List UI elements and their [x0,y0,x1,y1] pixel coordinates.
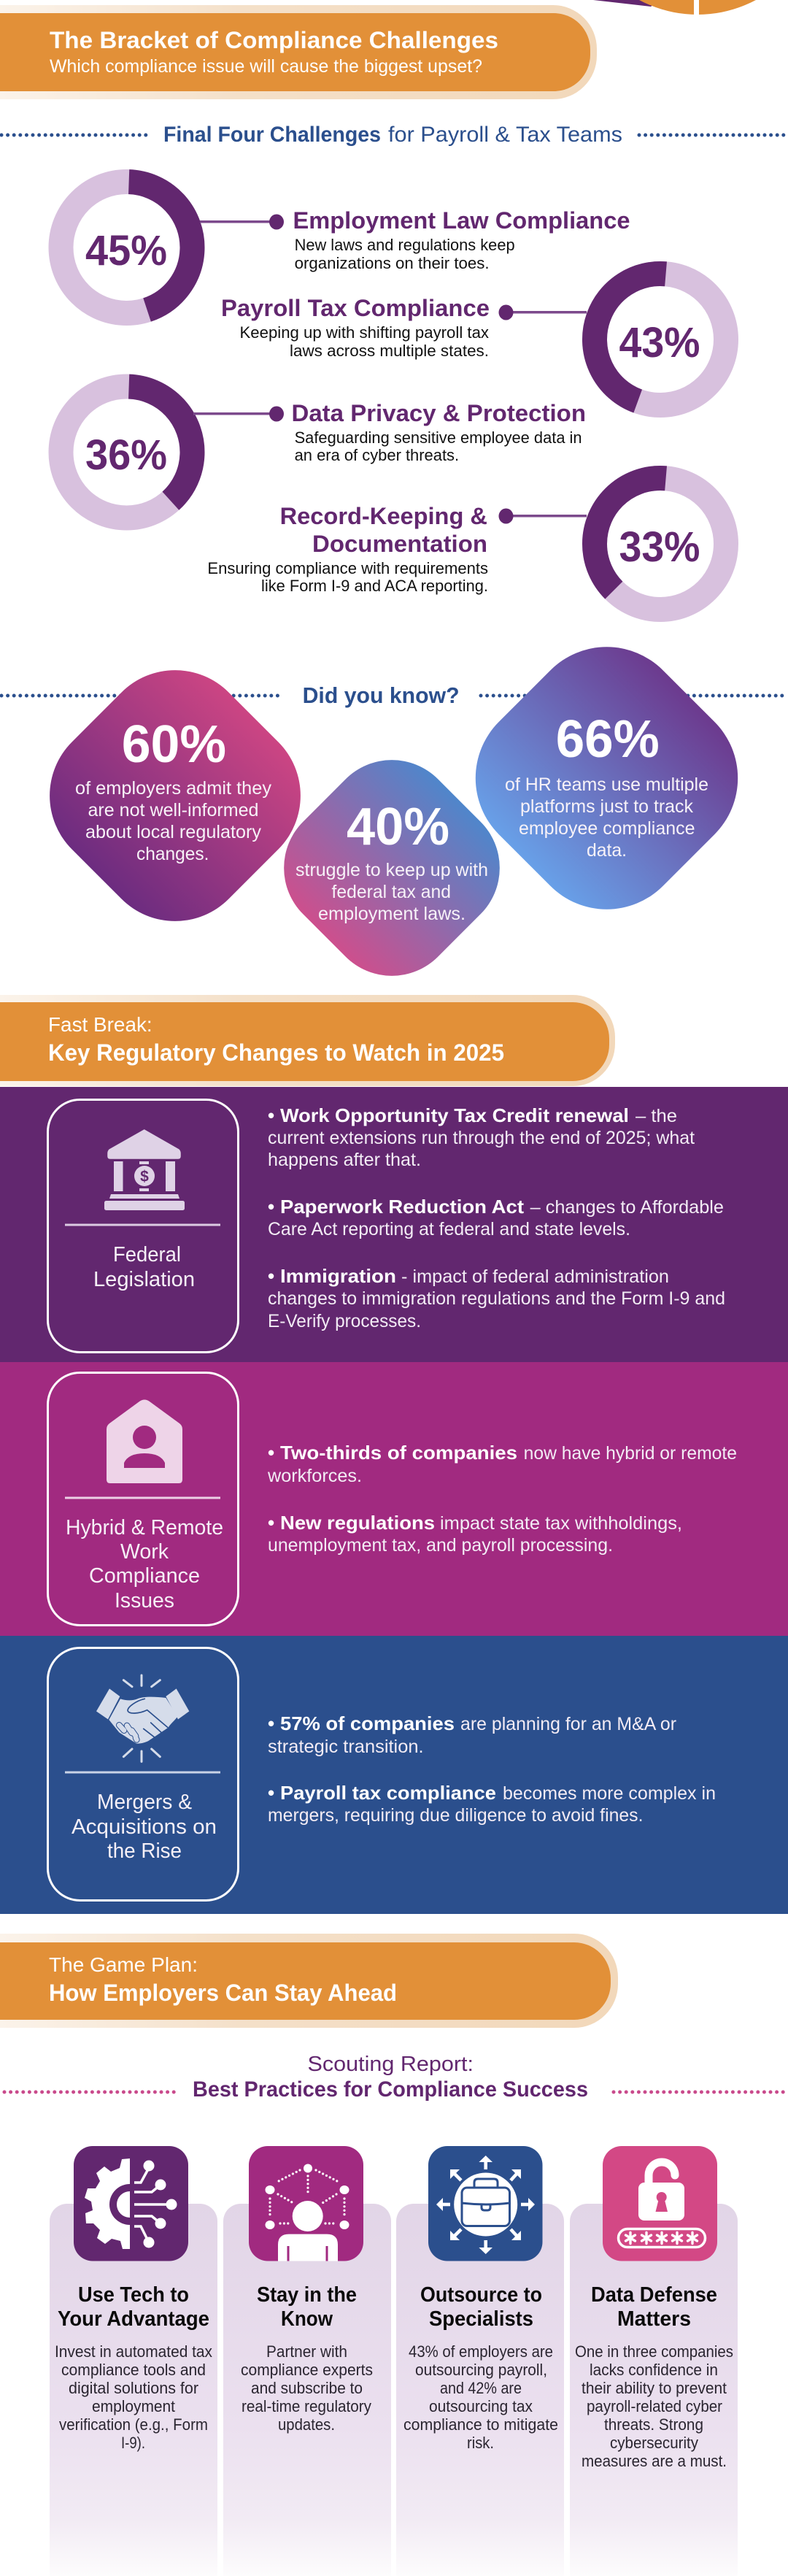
card: use tech to your advantage [50,2146,217,2576]
stat: 66% of HR teams: of HR teams use multiple [505,774,708,795]
challenge text: Payroll Tax Compliance [221,295,490,321]
card body [575,2342,733,2470]
bullet: work opportunity tax credit: Work Opportunity Tax Credit renewal [280,1104,629,1126]
label text: Acquisitions on [72,1815,217,1839]
card body: outsourcing payroll, [415,2361,547,2379]
panel: federal legislation [0,1087,788,1363]
challenge text: New laws and regulations keep [295,236,515,254]
label text: Work [120,1540,169,1564]
icon: bank with dollar: $ [140,1168,149,1185]
donut chart: 33%: 33% [619,523,700,571]
card: stay in the know [223,2146,391,2576]
bullet: 57% of companies: 57% of companies [280,1712,455,1734]
card title: Your Advantage [58,2307,209,2331]
icon: handshake [96,1675,189,1761]
banner: bracket of compliance challenges [0,5,597,99]
bullet: paperwork reduction act: • [268,1196,274,1218]
stat: 66% of HR teams: data. [587,840,627,861]
bullet: 57% of companies [268,1712,676,1757]
banner: bracket of compliance challenges: The Bracket of Compliance Challenges [50,27,498,53]
bullet: work opportunity tax credit: happens after that. [268,1150,421,1170]
stat: 66% of HR teams: 66% [556,710,660,769]
bullet: immigration: E-Verify processes. [268,1311,421,1331]
challenge text: Record-Keeping & [280,503,487,529]
bullet: work opportunity tax credit: • [268,1104,274,1126]
banner: the game plan: How Employers Can Stay Ahead [49,1980,397,2006]
bullet: two-thirds of companies: now have hybrid or remote [524,1443,737,1464]
stat: 40% struggle: employment laws. [318,904,466,924]
bullet: immigration: - impact of federal administration [401,1266,669,1287]
card body: One in three companies [575,2342,733,2361]
divider [65,1771,220,1774]
card body: 43% of employers are [409,2342,553,2361]
banner: fast break [0,995,615,1086]
challenge text: Employment Law Compliance [293,207,630,234]
heading: final four challenges: for Payroll & Tax Teams [388,123,622,147]
challenge text: an era of cyber threats. [295,446,459,464]
card title: Stay in the [257,2283,357,2307]
card title: Outsource to [420,2283,542,2307]
stat: 66% of HR teams: employee compliance [519,818,695,839]
bullet: 57% of companies: are planning for an M&A or [460,1714,676,1734]
bullet: immigration: Immigration [280,1265,396,1287]
challenge text: Keeping up with shifting payroll tax [239,323,489,342]
bullet: immigration: • [268,1265,274,1287]
label card: hybrid and remote [48,1372,238,1625]
card body: verification (e.g., Form [59,2415,208,2434]
bullet: two-thirds of companies: Two-thirds of companies [280,1442,517,1464]
label text: Compliance [89,1564,200,1588]
card body: digital solutions for [69,2379,198,2397]
bullet: paperwork reduction act: Paperwork Reduction Act [280,1196,524,1218]
card title [420,2283,542,2331]
icon: basketball fragment [573,0,788,16]
bullet: 57% of companies: strategic transition. [268,1737,424,1757]
card title: Know [281,2307,333,2331]
heading: final four challenges [1,123,788,147]
card body: employment [92,2397,175,2415]
bullet: paperwork reduction act [268,1196,724,1239]
bullet: new regulations: New regulations [280,1512,435,1534]
card body: their ability to prevent [582,2379,727,2397]
challenge: payroll tax compliance [221,255,744,423]
card body: Partner with [266,2342,347,2361]
icon: briefcase with arrows [428,2146,543,2261]
label card: federal legislation [48,1099,238,1352]
donut chart: 43% [576,255,744,423]
connector [193,406,284,422]
bullet: payroll tax compliance: Payroll tax compliance [280,1782,496,1804]
stat: 40% struggle: 40% [347,798,449,856]
challenge: data privacy and protection [58,384,586,520]
challenge text [292,400,586,464]
card body: compliance to mitigate [403,2415,558,2434]
bullet: payroll tax compliance: mergers, requiring due diligence to avoid fines. [268,1805,644,1826]
heading: scouting report [4,2053,788,2102]
heading: final four challenges: Final Four Challenges [163,123,381,147]
challenge text: Documentation [312,531,487,557]
bullet: work opportunity tax credit: – the [636,1106,677,1126]
bullet: new regulations: • [268,1512,274,1534]
heading: scouting report: Best Practices for Compliance Success [193,2077,588,2102]
label text: Issues [115,1589,174,1612]
bullet: new regulations [268,1512,682,1556]
donut chart: 33% [568,451,753,637]
challenge text [207,503,488,595]
stat: 60% of employers: are not well-informed [88,800,258,820]
challenge text: like Form I-9 and ACA reporting. [261,577,488,595]
bullet: work opportunity tax credit: current extensions run through the end of 2025; what [268,1128,695,1148]
bullet: paperwork reduction act: Care Act reporting at federal and state levels. [268,1219,630,1239]
bullet: immigration [268,1265,725,1331]
icon: gear and circuit [74,2146,188,2261]
banner: the game plan [0,1934,618,2028]
card body [241,2342,373,2434]
label text [93,1243,195,1291]
donut chart: 43%: 43% [619,319,700,366]
heading: scouting report: Scouting Report: [308,2053,474,2076]
card: outsource to specialists [396,2146,564,2576]
banner: bracket of compliance challenges: Which compliance issue will cause the biggest upset? [50,56,482,77]
card body: threats. Strong [604,2415,703,2434]
challenge: employment law compliance [58,180,630,315]
label text: the Rise [107,1839,182,1863]
label text [66,1516,223,1612]
card body: measures are a must. [582,2452,727,2470]
bullet: two-thirds of companies [267,1442,737,1486]
card: data defense matters [570,2146,738,2576]
card body: payroll-related cyber [587,2397,722,2415]
icon: house with person [107,1400,182,1483]
label text: Federal [113,1243,181,1266]
icon: open lock with password [603,2146,717,2261]
stat: 40% struggle [257,733,527,1003]
stat: 60% of employers: 60% [122,715,226,774]
challenge text: Safeguarding sensitive employee data in [295,428,582,447]
card title: Data Defense [591,2283,717,2307]
card body: real-time regulatory [242,2397,371,2415]
bullet: payroll tax compliance: • [268,1782,274,1804]
card body: I-9). [121,2434,145,2452]
card body: compliance experts [241,2361,373,2379]
card body [403,2342,558,2452]
challenge text: organizations on their toes. [295,254,490,272]
banner: fast break: Key Regulatory Changes to Watch in 2025 [48,1039,504,1066]
card body: risk. [467,2434,494,2452]
card title [58,2283,209,2331]
challenge text [293,207,630,272]
stat: 60% of employers [18,639,332,953]
bullet: 57% of companies: • [268,1712,274,1734]
card title: Specialists [429,2307,533,2331]
bullet: work opportunity tax credit [268,1104,695,1170]
card body: cybersecurity [610,2434,698,2452]
card body: updates. [278,2415,335,2434]
bullet: immigration: changes to immigration regulations and the Form I-9 and [268,1288,725,1309]
challenge text: Ensuring compliance with requirements [207,559,488,577]
card body: outsourcing tax [429,2397,533,2415]
bullet: payroll tax compliance [268,1782,716,1826]
challenge text: laws across multiple states. [290,342,489,360]
stat: 66% of HR teams [443,614,770,942]
heading: did you know: Did you know? [303,683,460,708]
connector [499,305,587,320]
bullet: two-thirds of companies: • [268,1442,274,1464]
label text: Hybrid & Remote [66,1516,223,1539]
stat: 60% of employers: changes. [136,844,209,864]
divider [65,1223,220,1226]
label text [72,1791,217,1863]
stat: 40% struggle: federal tax and [331,882,451,902]
banner: the game plan: The Game Plan: [49,1953,198,1976]
banner: fast break: Fast Break: [48,1013,152,1036]
card title [591,2283,717,2331]
card body: and 42% are [440,2379,522,2397]
card title [257,2283,357,2331]
donut chart: 36% [58,384,195,520]
card body: lacks confidence in [590,2361,718,2379]
challenge: record-keeping and documentation [207,451,753,637]
stat: 66% of HR teams: platforms just to track [520,796,693,817]
panel: mergers and acquisitions [0,1636,788,1914]
challenge text: Data Privacy & Protection [292,400,586,426]
card body: Invest in automated tax [55,2342,212,2361]
icon: person with network [249,2146,363,2261]
card title: Use Tech to [78,2283,189,2307]
label card: mergers and acquisitions [48,1648,238,1901]
connector [499,508,587,524]
bullet: new regulations: unemployment tax, and payroll processing. [268,1535,613,1556]
bullet: paperwork reduction act: – changes to Affordable [530,1197,724,1218]
card body [55,2342,212,2452]
label text: Mergers & [97,1791,192,1814]
donut chart: 45%: 45% [85,227,167,274]
connector [200,215,284,229]
card title: Matters [617,2307,691,2331]
card body: compliance tools and [61,2361,206,2379]
bullet: two-thirds of companies: workforces. [267,1466,362,1486]
card body: and subscribe to [251,2379,363,2397]
stat: 60% of employers: of employers admit they [75,778,271,799]
bullet: payroll tax compliance: becomes more complex in [503,1783,716,1804]
donut chart: 36%: 36% [85,431,167,479]
challenge text [221,295,490,360]
stat: 60% of employers: about local regulatory [85,822,261,842]
icon: bank with dollar [104,1130,185,1210]
panel: hybrid and remote work [0,1362,788,1636]
label text: Legislation [93,1268,195,1291]
bullet: new regulations: impact state tax withholdings, [440,1513,682,1534]
stat: 40% struggle: struggle to keep up with [296,860,488,880]
donut chart: 45% [58,180,195,315]
divider [65,1496,220,1499]
